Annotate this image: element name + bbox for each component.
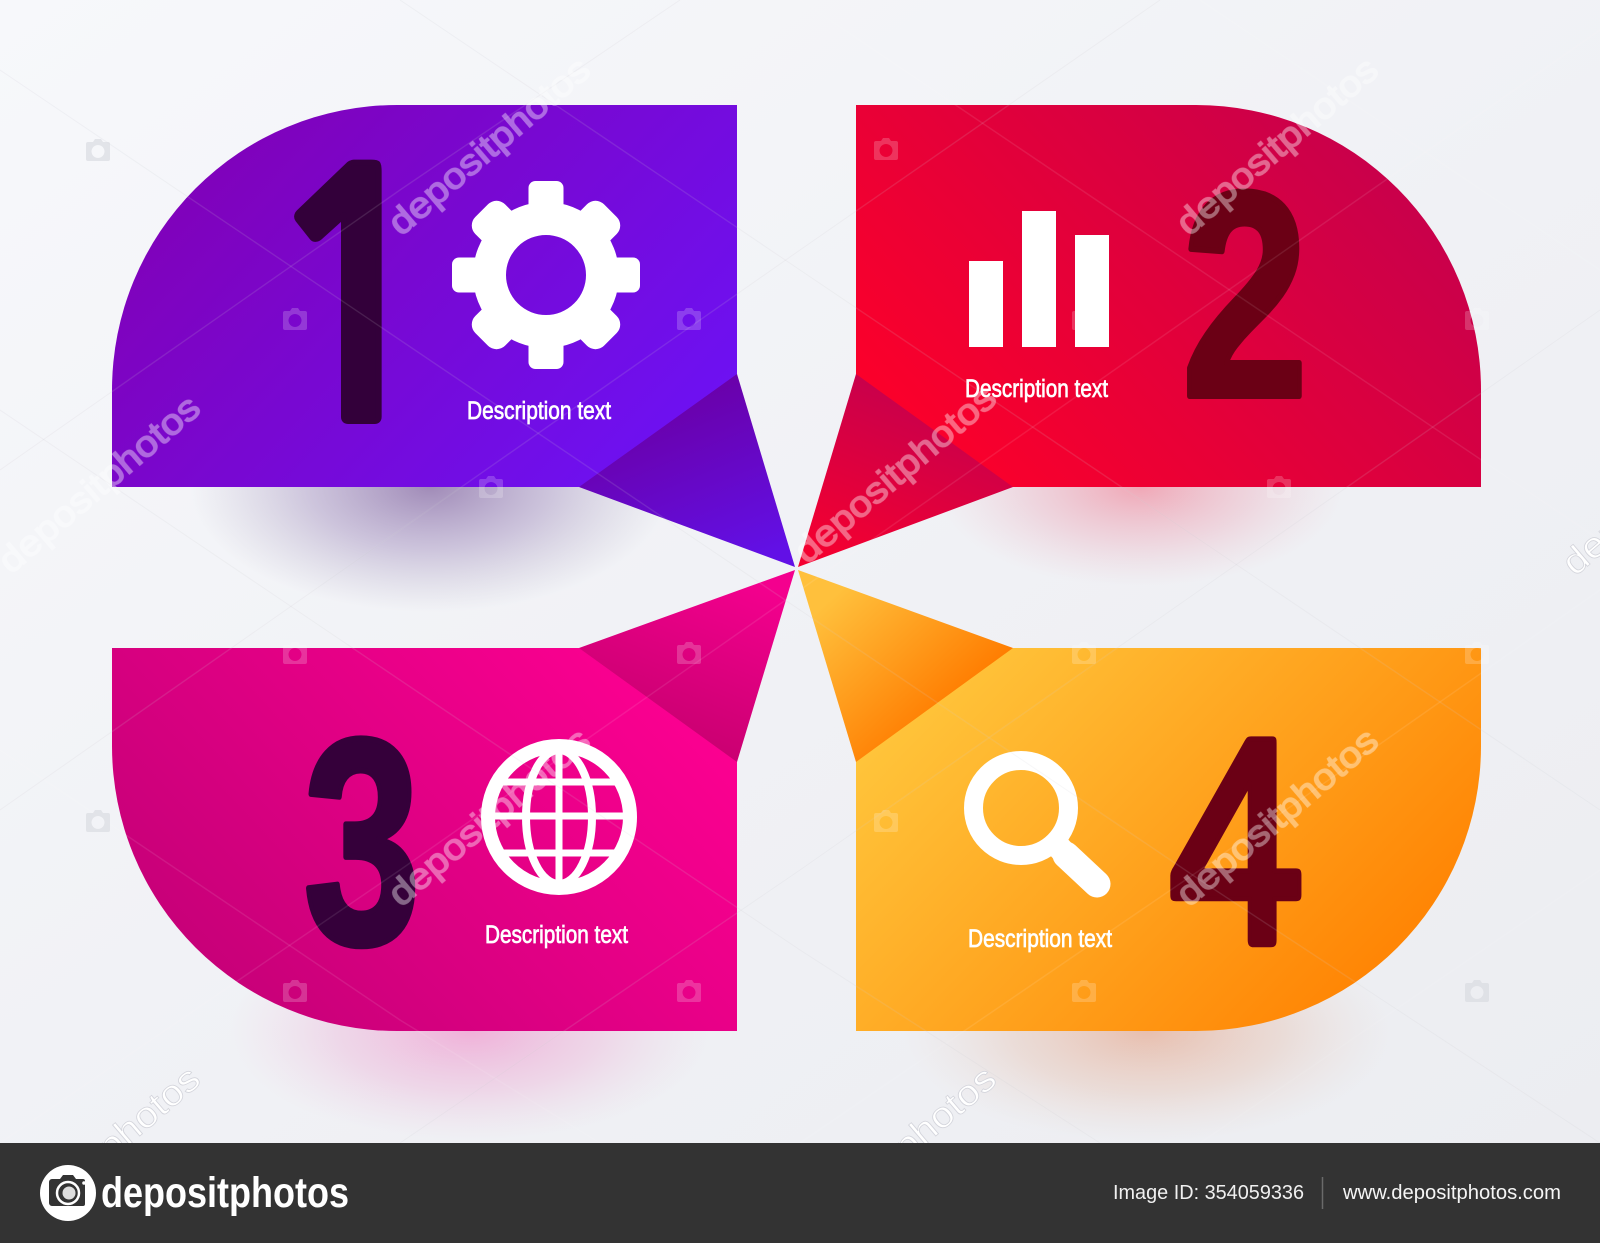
number 4: 4 (1166, 717, 1306, 985)
panel: step 2 (798, 105, 1481, 567)
description 2: Description text (965, 375, 1108, 403)
image id: Image ID: 354059336 (1113, 1182, 1304, 1204)
logo wordmark: depositphotos (101, 1169, 349, 1217)
panel 4 pointer (798, 570, 1013, 762)
icon: globe (488, 746, 630, 888)
watermark overlay: depositphotos (380, 719, 598, 914)
panel 1 pointer (579, 374, 795, 567)
footer banner (0, 1143, 1600, 1243)
shadow: panel 1 (190, 362, 670, 612)
watermark overlay: depositphotos (1168, 48, 1386, 243)
shadow: panel 3 (230, 921, 710, 1141)
watermark overlay: depositphotos (786, 376, 1004, 571)
description 3: Description text (485, 921, 628, 949)
panel 3 body (112, 648, 737, 1031)
panel: step 4 (798, 570, 1481, 1031)
description 1: Description text (467, 397, 611, 425)
icon: camera logo (40, 1165, 96, 1221)
panel: step 3 (112, 570, 795, 1031)
watermark overlay: depositphotos (380, 48, 598, 243)
watermark overlay: depositphotos (1168, 719, 1386, 914)
panel 4 body (856, 648, 1481, 1031)
icon: bar chart (969, 211, 1109, 347)
description 4: Description text (968, 925, 1112, 953)
website url: www.depositphotos.com (1342, 1182, 1561, 1204)
number 2: 2 (1181, 131, 1309, 458)
number 1: 1 (255, 134, 453, 471)
shadow: panel 4 (902, 919, 1392, 1143)
panel 2 body (856, 105, 1481, 487)
panel: step 1 (112, 105, 795, 567)
icon: gear (452, 181, 640, 369)
panel 1 body (112, 105, 737, 487)
panel 2 pointer (798, 374, 1013, 567)
panel 3 pointer (579, 570, 795, 762)
number 3: 3 (303, 679, 421, 1006)
shadow: panel 2 (935, 387, 1345, 587)
icon: magnifier (974, 760, 1097, 884)
